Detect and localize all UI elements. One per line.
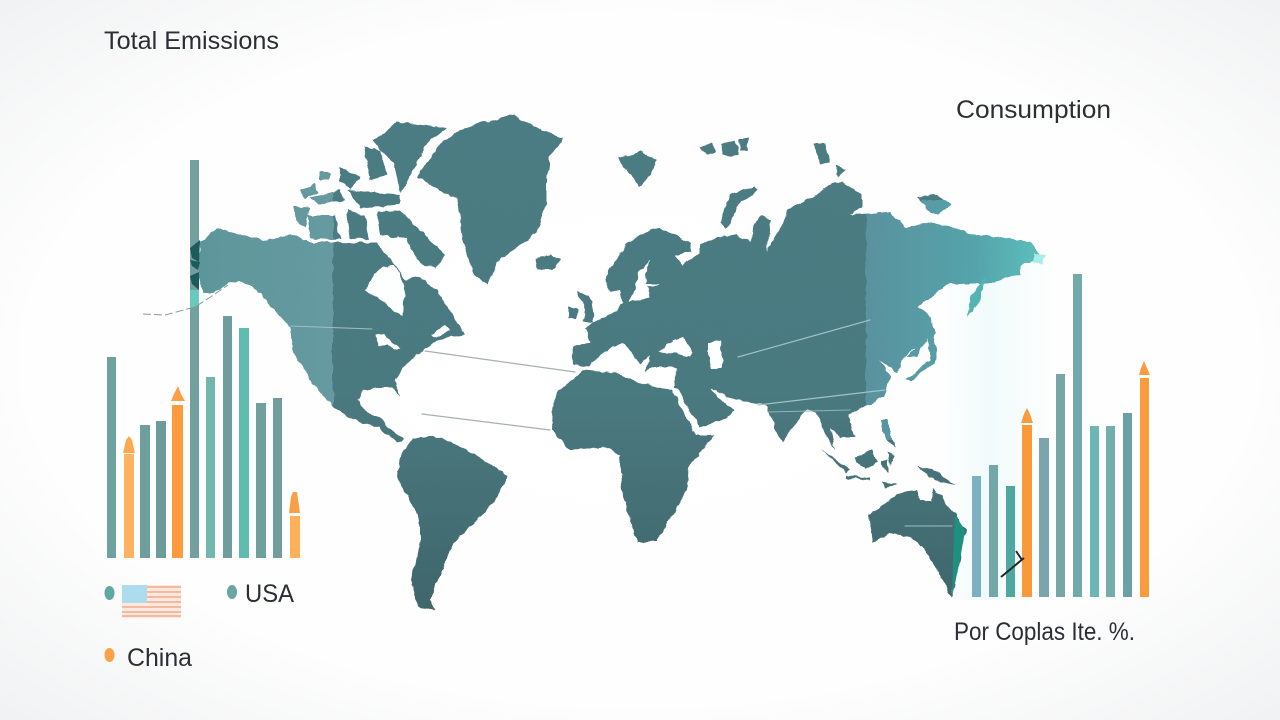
icon: US flag <box>122 585 181 618</box>
heading: consumption: Consumption <box>956 96 1111 124</box>
heading: total emissions: Total Emissions <box>104 27 279 55</box>
icon: black arrow mark <box>1001 551 1024 577</box>
legend label China: China <box>127 644 192 672</box>
shipping and connector lines <box>290 320 952 526</box>
soft cyan haze behind right chart <box>940 250 1060 600</box>
legend label USA: USA <box>245 580 294 608</box>
legend dot USA <box>227 585 237 599</box>
map land masses <box>190 115 1046 610</box>
legend dot teal <box>104 586 114 600</box>
bar chart: consumption per capita <box>972 274 1150 597</box>
axis label: right chart: Por Coplas Ite. %. <box>954 618 1135 646</box>
Australia east coast highlight <box>952 515 965 597</box>
legend dot China <box>104 648 114 662</box>
glitch marks where tall bar crosses Alaska <box>190 240 200 290</box>
bar chart: total emissions <box>107 160 300 558</box>
world map <box>190 115 1046 610</box>
legend: left chart <box>104 580 294 672</box>
